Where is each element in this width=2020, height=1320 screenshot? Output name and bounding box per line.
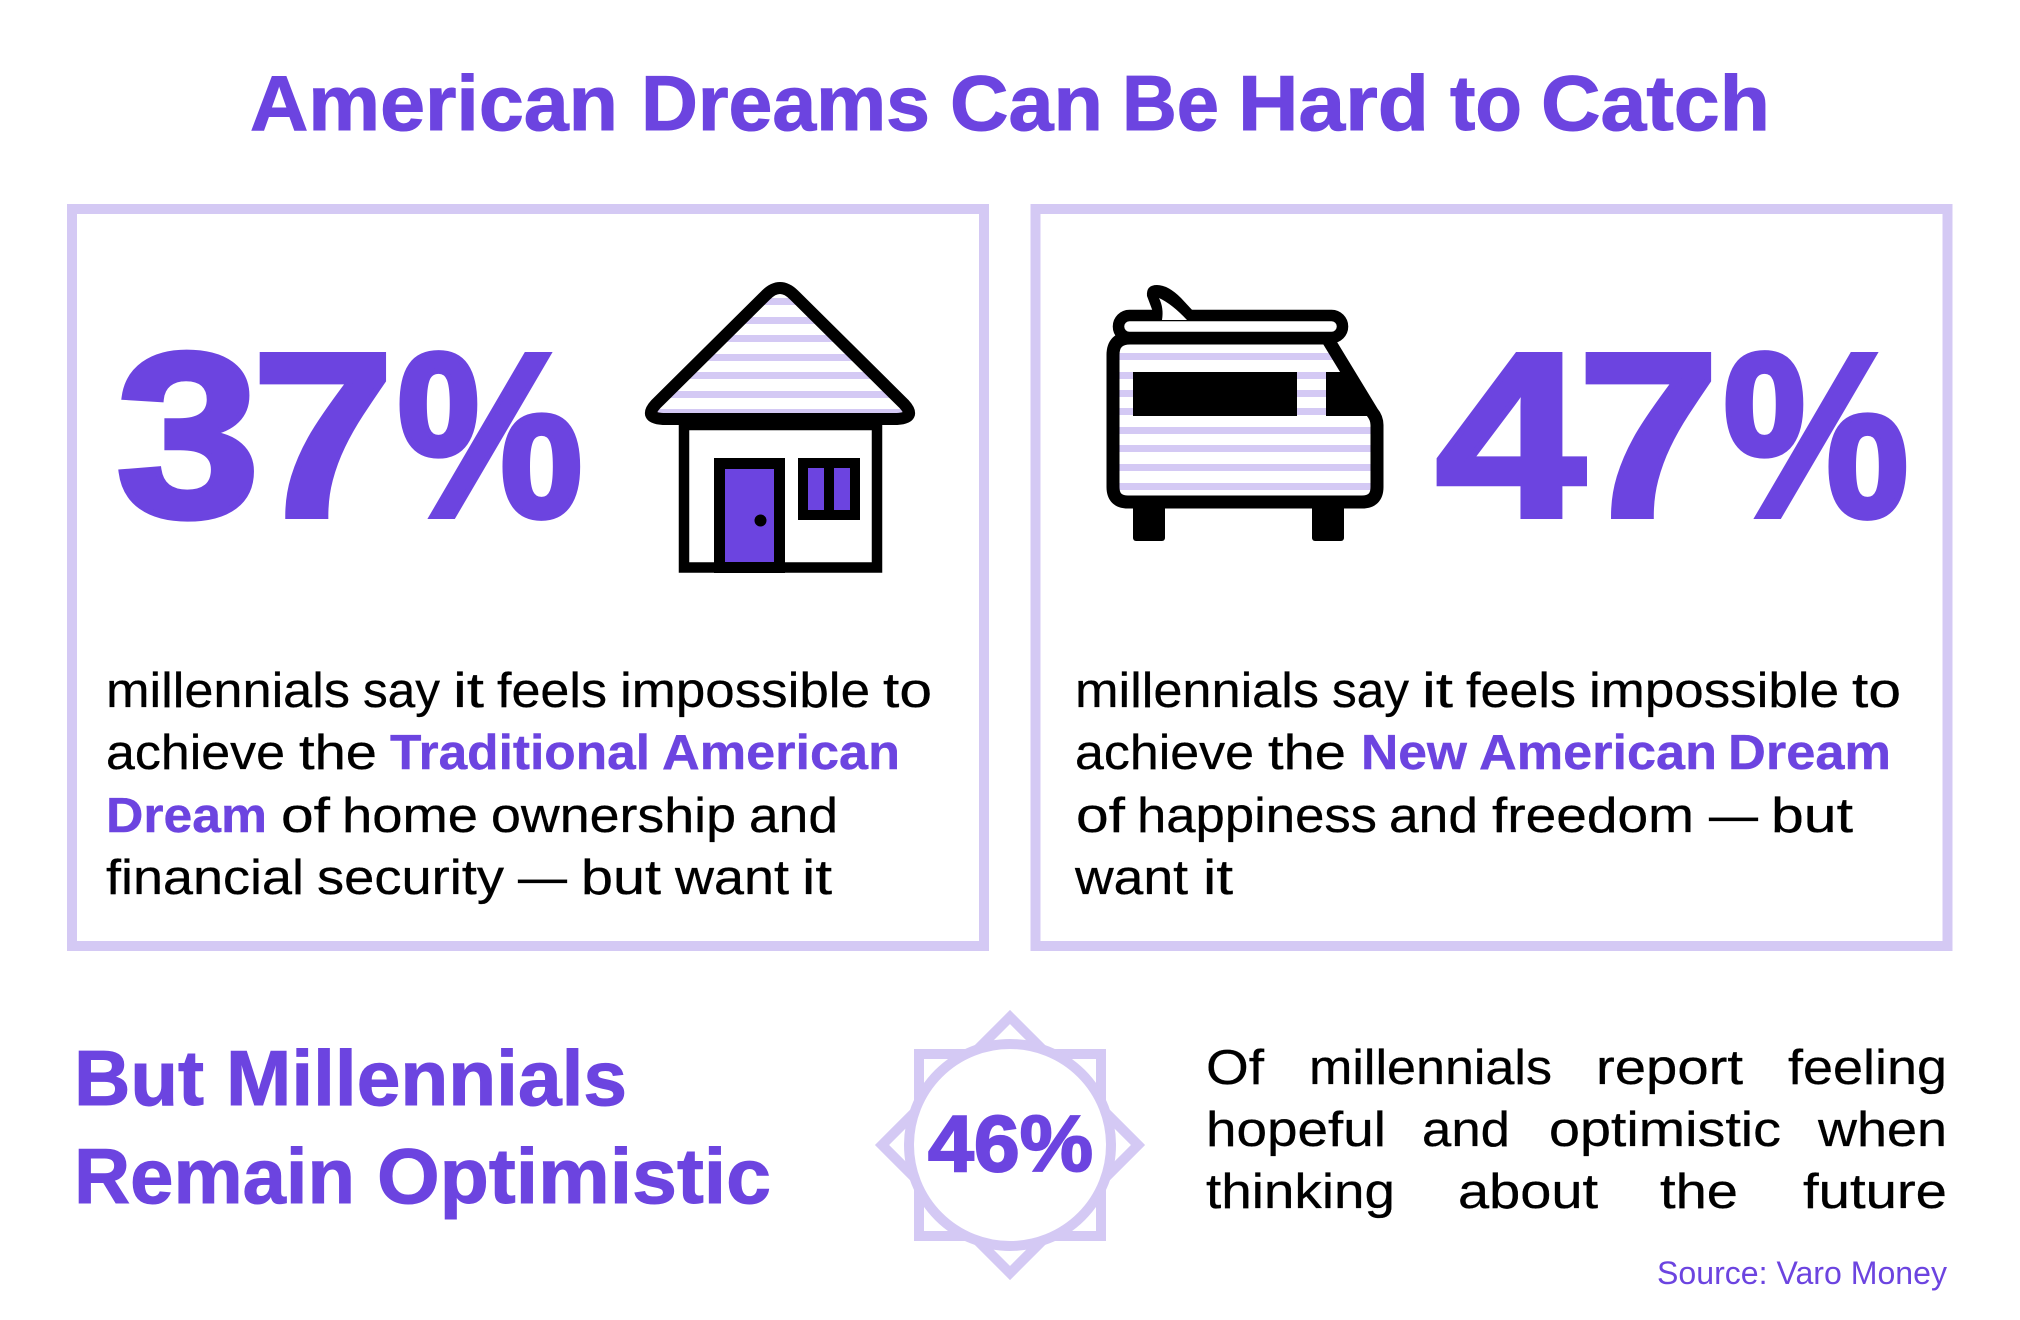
title: Be — [1122, 59, 1219, 147]
body text: it — [1422, 664, 1453, 718]
icon: van — [1105, 285, 1385, 541]
body text: achieve — [106, 726, 285, 780]
body text: security — [317, 851, 505, 905]
paragraph: hopeful and optimistic: and — [1422, 1103, 1510, 1157]
body text: the — [1268, 726, 1346, 780]
paragraph: hopeful and optimistic: hopeful — [1206, 1103, 1386, 1157]
paragraph: hopeful and optimistic: millennials — [1309, 1041, 1552, 1095]
big number: 47% — [1436, 304, 1909, 566]
big number: 47%: 7 — [1578, 304, 1719, 566]
body text: feels — [1466, 664, 1576, 718]
body text: achieve — [1075, 726, 1254, 780]
body text: feels — [497, 664, 607, 718]
paragraph: hopeful and optimistic: about — [1458, 1165, 1598, 1219]
big number: 37%: 3 — [116, 304, 260, 566]
body text: say — [1332, 664, 1409, 718]
body text: Dream — [1728, 726, 1891, 780]
body text — [1074, 664, 1901, 905]
body text: — — [518, 851, 567, 905]
big number: 37%: 7 — [252, 304, 394, 566]
big number: 37% — [116, 304, 583, 566]
body text: impossible — [620, 664, 870, 718]
body text: of — [1076, 789, 1125, 843]
big number: 37%: % — [397, 304, 583, 566]
body text: American — [662, 726, 900, 780]
body text: it — [1203, 851, 1233, 905]
heading: but millennials remain optimistic — [74, 1034, 771, 1220]
body text: millennials — [1075, 664, 1319, 718]
body text: to — [883, 664, 932, 718]
big number: 47%: % — [1723, 304, 1909, 566]
body text: and — [1389, 789, 1478, 843]
paragraph: hopeful and optimistic: thinking — [1206, 1165, 1395, 1219]
body text: happiness — [1137, 789, 1377, 843]
body text: ownership — [491, 789, 736, 843]
panel: traditional american dream — [72, 209, 984, 946]
body text: financial — [106, 851, 304, 905]
body text: — — [1709, 789, 1758, 843]
body text: freedom — [1492, 789, 1694, 843]
body text: New — [1361, 726, 1468, 780]
title: Catch — [1541, 59, 1770, 147]
paragraph: hopeful and optimistic: Of — [1206, 1041, 1264, 1095]
body text: millennials — [106, 664, 350, 718]
title: Dreams — [641, 59, 930, 147]
title: Can — [950, 59, 1103, 147]
body text: the — [299, 726, 377, 780]
paragraph: hopeful and optimistic: the — [1660, 1165, 1738, 1219]
body text: want — [674, 851, 789, 905]
title: to — [1450, 59, 1522, 147]
body text — [106, 664, 932, 905]
badge value: 46% — [928, 1099, 1093, 1188]
heading: but millennials remain optimistic: Millennials — [226, 1034, 627, 1122]
paragraph: hopeful and optimistic: report — [1596, 1041, 1743, 1095]
body text: and — [749, 789, 838, 843]
body text: want — [1074, 851, 1188, 905]
paragraph: hopeful and optimistic: optimistic — [1549, 1103, 1781, 1157]
body text: Traditional — [390, 726, 650, 780]
title — [250, 59, 1770, 147]
title: American — [250, 59, 618, 147]
big number: 47%: 4 — [1436, 304, 1585, 566]
body text: to — [1852, 664, 1901, 718]
body text: of — [281, 789, 330, 843]
paragraph: hopeful and optimistic: feeling — [1788, 1041, 1947, 1095]
badge: 46% star — [882, 1017, 1138, 1273]
body text: it — [453, 664, 484, 718]
body text: but — [581, 851, 661, 905]
heading: but millennials remain optimistic: Remain — [74, 1132, 355, 1220]
title: Hard — [1238, 59, 1429, 147]
body text: it — [802, 851, 832, 905]
body text: say — [363, 664, 440, 718]
paragraph: hopeful and optimistic: when — [1817, 1103, 1947, 1157]
body text: but — [1771, 789, 1853, 843]
paragraph: hopeful and optimistic — [1206, 1041, 1947, 1219]
paragraph: hopeful and optimistic: future — [1803, 1165, 1947, 1219]
heading: but millennials remain optimistic: Optimistic — [377, 1132, 771, 1220]
body text: Dream — [106, 789, 267, 843]
heading: but millennials remain optimistic: But — [74, 1034, 204, 1122]
source: Source: Varo Money — [1657, 1255, 1947, 1291]
body text: impossible — [1589, 664, 1839, 718]
body text: American — [1479, 726, 1717, 780]
panel: new american dream — [1036, 209, 1948, 946]
icon: house — [640, 288, 920, 568]
body text: home — [342, 789, 478, 843]
